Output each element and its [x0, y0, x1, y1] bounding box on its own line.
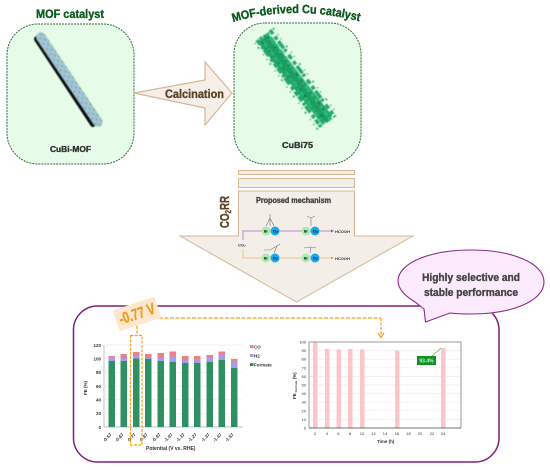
axis labels: 40	[96, 398, 101, 402]
heading: MOF-derived Cu catalyst: MOF-derived Cu catalyst	[231, 4, 361, 22]
axis labels: 70	[302, 365, 307, 370]
bar chart: formate FE stability over time: 8	[349, 431, 352, 436]
icon: CuBi-MOF rod	[37, 37, 98, 124]
bar chart: formate FE stability over time: 18	[406, 431, 411, 436]
diagram: reaction pathways: HCOOH	[335, 256, 350, 261]
diagram: reaction pathways: CO₂	[238, 242, 246, 248]
bar chart: formate FE stability over time: 6	[337, 431, 340, 436]
bars	[313, 342, 446, 428]
bar chart: formate FE stability over time: 14	[383, 431, 388, 436]
bar chart: formate FE stability over time: 22	[430, 431, 435, 436]
arrow: Calcination: Calcination	[165, 89, 224, 101]
diagram: reaction pathways: Bi	[264, 256, 268, 260]
diagram: reaction pathways: Cu	[273, 230, 278, 234]
axis labels: -0.87	[138, 432, 149, 443]
axis labels: -0.57	[102, 432, 113, 443]
heading: MOF catalyst: MOF catalyst	[36, 7, 104, 21]
arrow: CO2RR mechanism	[180, 170, 413, 302]
axis labels: 60	[96, 384, 101, 389]
bar chart: formate FE stability over time: (%)	[292, 372, 297, 381]
diagram: reaction pathways	[238, 214, 350, 262]
axis labels: -1.57	[224, 432, 235, 443]
bar chart: formate FE stability over time: 12	[371, 431, 376, 436]
bar chart: formate FE stability over time: Formate	[294, 380, 298, 393]
axis labels: -0.97	[151, 432, 162, 443]
heading: Proposed mechanism: Proposed mechanism	[256, 196, 331, 205]
label: CuBi-MOF: CuBi-MOF	[50, 145, 91, 154]
diagram: reaction pathways: Cu	[273, 256, 278, 260]
axis labels: -0.67	[114, 432, 125, 443]
axis labels: 60	[302, 374, 307, 379]
axis labels: 0	[98, 425, 101, 430]
bar chart: Faradaic efficiency vs potential	[83, 343, 272, 452]
bar chart: Faradaic efficiency vs potential: Potential (V vs. RHE)	[146, 446, 196, 452]
axis labels	[93, 343, 235, 443]
diagram: reaction pathways: Cu	[313, 230, 318, 234]
diagram: reaction pathways: HCOOH	[335, 229, 350, 234]
panel: performance frame	[74, 306, 499, 462]
CO bars	[108, 352, 238, 361]
arrow: dashed connector to stability chart	[137, 318, 384, 338]
formate bars	[108, 358, 238, 427]
bar chart: formate FE stability over time: 4	[326, 431, 329, 436]
axis labels: -1.27	[187, 432, 198, 443]
callout: Highly selective and stable performance: stable performance	[424, 287, 518, 299]
label: -0.77 V tag: -0.77 V	[117, 301, 158, 328]
panel: MOF-derived Cu catalyst	[231, 4, 362, 164]
legend: Formate	[254, 362, 272, 368]
axis labels: -1.17	[175, 432, 186, 443]
icon: CuBi75 rod	[255, 28, 338, 130]
axis labels: 20	[96, 411, 101, 416]
axis labels: -0.77	[126, 432, 137, 443]
axis labels: 120	[93, 343, 101, 348]
diagram: reaction pathways: Bi	[304, 256, 308, 260]
axis labels: -1.07	[163, 432, 174, 443]
axis labels: 0	[304, 426, 307, 430]
bar chart: formate FE stability over time: 20	[418, 431, 423, 436]
legend: H2	[254, 354, 260, 358]
H2 bars	[108, 354, 238, 368]
label: CO2RR: RR	[218, 196, 232, 210]
bar chart: formate FE stability over time: 16	[395, 431, 400, 436]
axis labels: 100	[299, 340, 307, 344]
axis labels	[299, 340, 307, 430]
callout: Highly selective and stable performance	[398, 250, 544, 322]
diagram: reaction pathways: Bi	[304, 230, 308, 234]
legend	[250, 344, 272, 368]
callout: 93.4%: 93.4%	[419, 358, 434, 364]
axis labels: -1.47	[212, 432, 223, 443]
axis labels: 90	[302, 348, 307, 353]
axis labels: 20	[302, 408, 307, 413]
diagram: reaction pathways: Cu	[313, 256, 318, 260]
label: CO2RR: 2	[224, 210, 233, 213]
bar chart: formate FE stability over time: Time (h)	[377, 439, 395, 444]
axis labels: 80	[96, 370, 101, 375]
bar chart: formate FE stability over time: FE	[292, 393, 297, 399]
bar chart: formate FE stability over time: 2	[314, 431, 317, 436]
bar chart: formate FE stability over time: 24	[441, 431, 446, 436]
axis labels: 30	[302, 400, 307, 405]
highlight: dashed selection around -0.77 V bar	[130, 336, 142, 445]
axis labels: 100	[93, 356, 101, 362]
bar chart: formate FE stability over time: 10	[360, 431, 365, 436]
callout: 93.4%	[417, 348, 441, 365]
axis labels: 10	[302, 417, 307, 422]
bar chart: formate FE stability over time	[292, 340, 461, 444]
axis labels: 40	[302, 391, 307, 396]
label: CuBi75: CuBi75	[282, 141, 314, 150]
axis labels: 50	[302, 382, 307, 388]
arrow: Calcination	[134, 62, 232, 125]
axis labels: -1.37	[200, 432, 211, 443]
label: CO2RR: CO	[218, 209, 232, 228]
legend: CO	[254, 344, 261, 350]
panel: MOF catalyst	[7, 7, 134, 164]
diagram: reaction pathways: Bi	[264, 230, 268, 234]
axis labels: 80	[302, 357, 307, 362]
bar chart: Faradaic efficiency vs potential: FE (%)	[83, 380, 88, 395]
callout: Highly selective and stable performance: Highly selective and	[422, 272, 520, 284]
